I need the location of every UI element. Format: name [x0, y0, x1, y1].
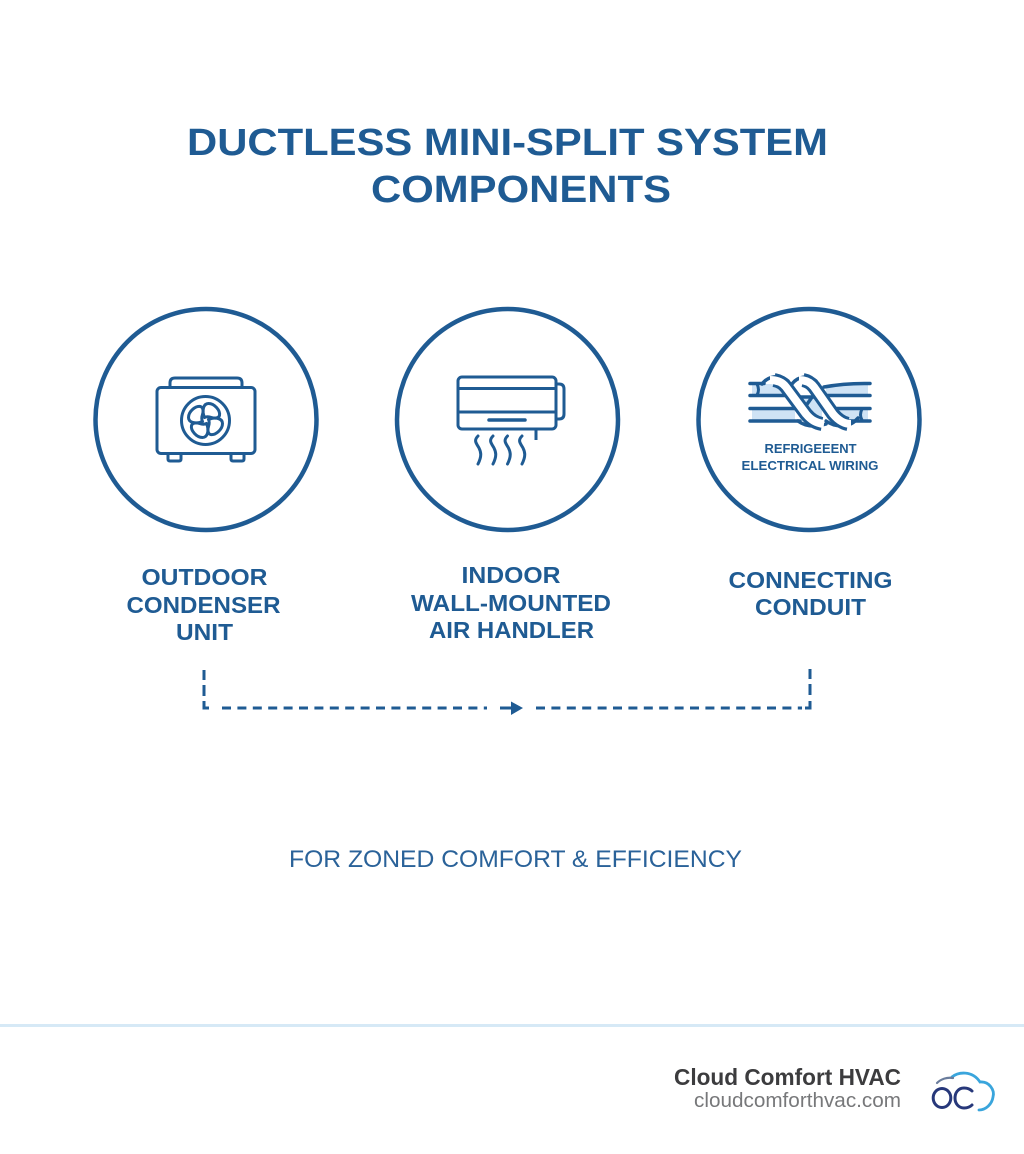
footer brand text — [674, 1064, 901, 1112]
label: outdoor condenser unit: OUTDOOR — [142, 564, 268, 590]
icon: twisted refrigerant lines and wiring — [750, 377, 870, 426]
label: outdoor condenser unit: UNIT — [176, 619, 233, 645]
arrow: dashed connector between outdoor unit and conduit — [204, 669, 810, 715]
twisted strand B — [803, 380, 848, 424]
label: indoor wall-mounted air handler: INDOOR — [462, 562, 561, 588]
twisted strand A — [774, 380, 822, 424]
icon: company cloud logo — [933, 1073, 993, 1110]
icon caption: refrigerant and wiring — [742, 442, 878, 473]
panel: outdoor condenser unit — [96, 309, 316, 645]
footer divider — [0, 1024, 1024, 1027]
icon: wall-mounted air handler — [458, 377, 564, 464]
footer brand text: Cloud Comfort HVAC — [674, 1064, 901, 1090]
panel: connecting conduit — [698, 309, 920, 620]
title — [187, 122, 828, 211]
footer brand text: cloudcomforthvac.com — [694, 1090, 901, 1112]
title: COMPONENTS — [371, 169, 671, 211]
label: indoor wall-mounted air handler — [411, 562, 611, 643]
icon caption: refrigerant and wiring: REFRIGEEENT — [764, 442, 857, 456]
icon: outdoor condenser with fan — [157, 378, 255, 461]
label: outdoor condenser unit — [126, 564, 281, 645]
label: connecting conduit: CONNECTING — [728, 567, 892, 593]
label: indoor wall-mounted air handler: WALL-MOUNTED — [411, 590, 611, 616]
tagline: FOR ZONED COMFORT & EFFICIENCY — [289, 846, 742, 873]
label: connecting conduit — [728, 567, 892, 620]
label: connecting conduit: CONDUIT — [755, 594, 866, 620]
label: indoor wall-mounted air handler: AIR HANDLER — [429, 617, 594, 643]
icon: conduit circle — [698, 309, 920, 530]
title: DUCTLESS MINI-SPLIT SYSTEM — [187, 122, 828, 164]
icon: outdoor unit circle — [96, 309, 316, 530]
icon caption: refrigerant and wiring: ELECTRICAL WIRING — [742, 459, 878, 473]
label: outdoor condenser unit: CONDENSER — [126, 592, 281, 618]
icon: indoor unit circle — [397, 309, 618, 530]
panel: indoor wall-mounted air handler — [397, 309, 618, 643]
